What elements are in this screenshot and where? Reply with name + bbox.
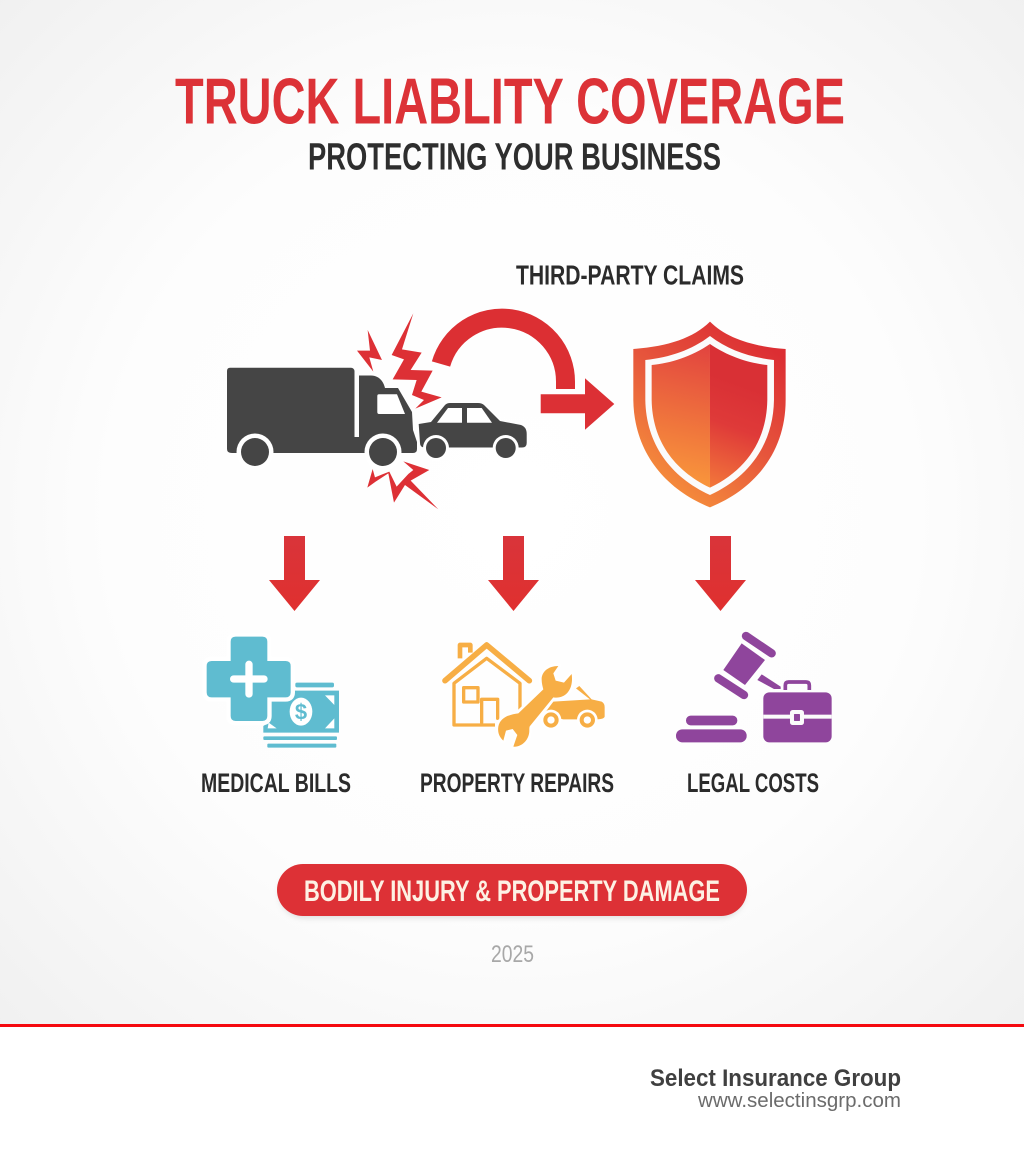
icon: medical cross and cash (207, 637, 339, 748)
icon: house, wrench and car (445, 645, 605, 747)
icon: gavel and briefcase (676, 636, 832, 742)
heading: third-party claims: THIRD-PARTY CLAIMS (516, 260, 744, 290)
wrench (498, 666, 572, 747)
briefcase (763, 682, 832, 742)
gavel (676, 636, 781, 742)
arrow: down to legal costs (695, 536, 746, 611)
footer website: www.selectinsgrp.com (697, 1090, 901, 1112)
badge: bodily injury and property damage (277, 864, 747, 918)
house (445, 645, 529, 725)
label: medical bills: MEDICAL BILLS (201, 768, 351, 798)
car (419, 403, 527, 461)
footer company name: Select Insurance Group (650, 1065, 901, 1092)
impact bolts (357, 313, 442, 509)
arrow: curved arrow to shield (441, 318, 614, 430)
truck (227, 368, 417, 470)
year: 2025 (491, 941, 534, 968)
icon: truck colliding with car (227, 313, 527, 509)
label: property repairs: PROPERTY REPAIRS (420, 768, 614, 798)
label: legal costs: LEGAL COSTS (687, 768, 819, 798)
icon: shield (633, 322, 786, 507)
footer band (0, 1024, 1024, 1154)
badge: bodily injury and property damage: BODILY INJURY & PROPERTY DAMAGE (304, 875, 720, 908)
arrow: down to medical bills (269, 536, 320, 611)
subtitle: PROTECTING YOUR BUSINESS (308, 136, 721, 178)
icon: medical cross and cash: $ (295, 699, 307, 724)
arrow: down to property repairs (488, 536, 539, 611)
car (541, 686, 605, 730)
